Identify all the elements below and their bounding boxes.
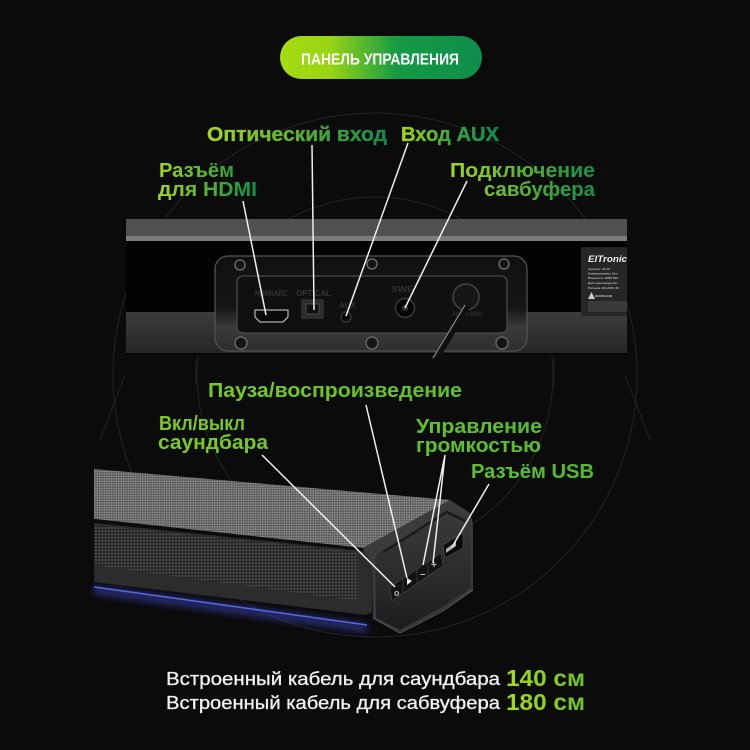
top grille face [94, 469, 450, 548]
label: subwoofer connection: савбуфера [484, 178, 596, 201]
label: optical input: Оптический вход [207, 123, 387, 146]
label: USB connector: Разъём USB [471, 460, 594, 483]
subwoofer port [396, 298, 414, 318]
connector panel plate: AC 100-240V [452, 312, 482, 318]
product label sticker: Наименование: Бен [588, 272, 618, 276]
product label sticker: Дата производства: [588, 281, 618, 285]
label: subwoofer connection: Подключение [450, 159, 595, 182]
button strip: o [394, 588, 400, 598]
pointer: play pause [366, 405, 407, 578]
pointer: optical [312, 145, 314, 310]
end cap rim [363, 500, 473, 632]
soundbar cable length: Встроенный кабель для саундбара [166, 669, 501, 689]
button strip [390, 553, 443, 601]
pointer lines [243, 143, 489, 587]
power cable [433, 284, 479, 358]
pointer: volume [423, 455, 445, 565]
blue LED glow [94, 587, 367, 628]
connector panel plate: OPTICAL [296, 289, 331, 298]
label: HDMI connector [158, 159, 257, 201]
product label sticker [581, 247, 628, 316]
label: volume control: Управление [416, 415, 542, 438]
pointer: USB [452, 484, 489, 547]
heading pill: панель управления: ПАНЕЛЬ УПРАВЛЕНИЯ [301, 52, 459, 68]
label: power: саундбара [158, 431, 269, 454]
label: power [158, 412, 269, 454]
optical port [302, 300, 323, 318]
subwoofer cable length: Встроенный кабель для сабвуфера [166, 693, 501, 713]
label: volume control: громкостью [416, 434, 541, 457]
connector panel plate [215, 256, 527, 351]
soundbar cable length: 140 см [506, 665, 585, 691]
cable length text [166, 665, 585, 715]
connector panel plate: AUX [339, 301, 357, 310]
pointer: power button [262, 455, 395, 587]
heading pill: панель управления [280, 36, 482, 79]
label: AUX input: Вход AUX [401, 123, 499, 146]
label: subwoofer connection [450, 159, 596, 201]
subwoofer cable length: 180 см [506, 689, 585, 715]
connector panel plate: SWF [391, 285, 413, 294]
HDMI port [255, 310, 288, 322]
product label sticker: Мощность: RMS 300 [588, 276, 618, 280]
soundbar front photo with buttons [94, 469, 473, 633]
end cap face [375, 510, 471, 630]
label: HDMI connector: для HDMI [158, 178, 257, 201]
connector panel plate: HDMI/ARC [255, 289, 288, 298]
subwoofer cable length [166, 689, 585, 715]
product label sticker: ВНИМАНИЕ [595, 294, 612, 298]
label: power: Вкл/выкл [159, 412, 245, 435]
product label sticker: Артикул: 20-16 [588, 267, 610, 271]
label: HDMI connector: Разъём [159, 159, 234, 182]
front speaker grille [94, 525, 358, 601]
front body [94, 519, 372, 615]
soundbar cable length [166, 665, 585, 691]
pointer: subwoofer [405, 181, 467, 308]
product label sticker: Питание 110-240V, 50 [588, 286, 619, 290]
pointer: HDMI [243, 201, 266, 315]
button strip: – [420, 569, 426, 580]
USB port [443, 533, 463, 558]
label: play pause: Пауза/воспроизведение [208, 379, 462, 402]
rear top grille [126, 219, 627, 236]
button strip: + [431, 560, 437, 571]
label: volume control [416, 415, 542, 457]
product label sticker: ElTronic [588, 254, 628, 265]
soundbar rear photo with connector panel [126, 219, 628, 358]
AUX port [341, 312, 351, 322]
pointer: AUX [346, 143, 408, 316]
